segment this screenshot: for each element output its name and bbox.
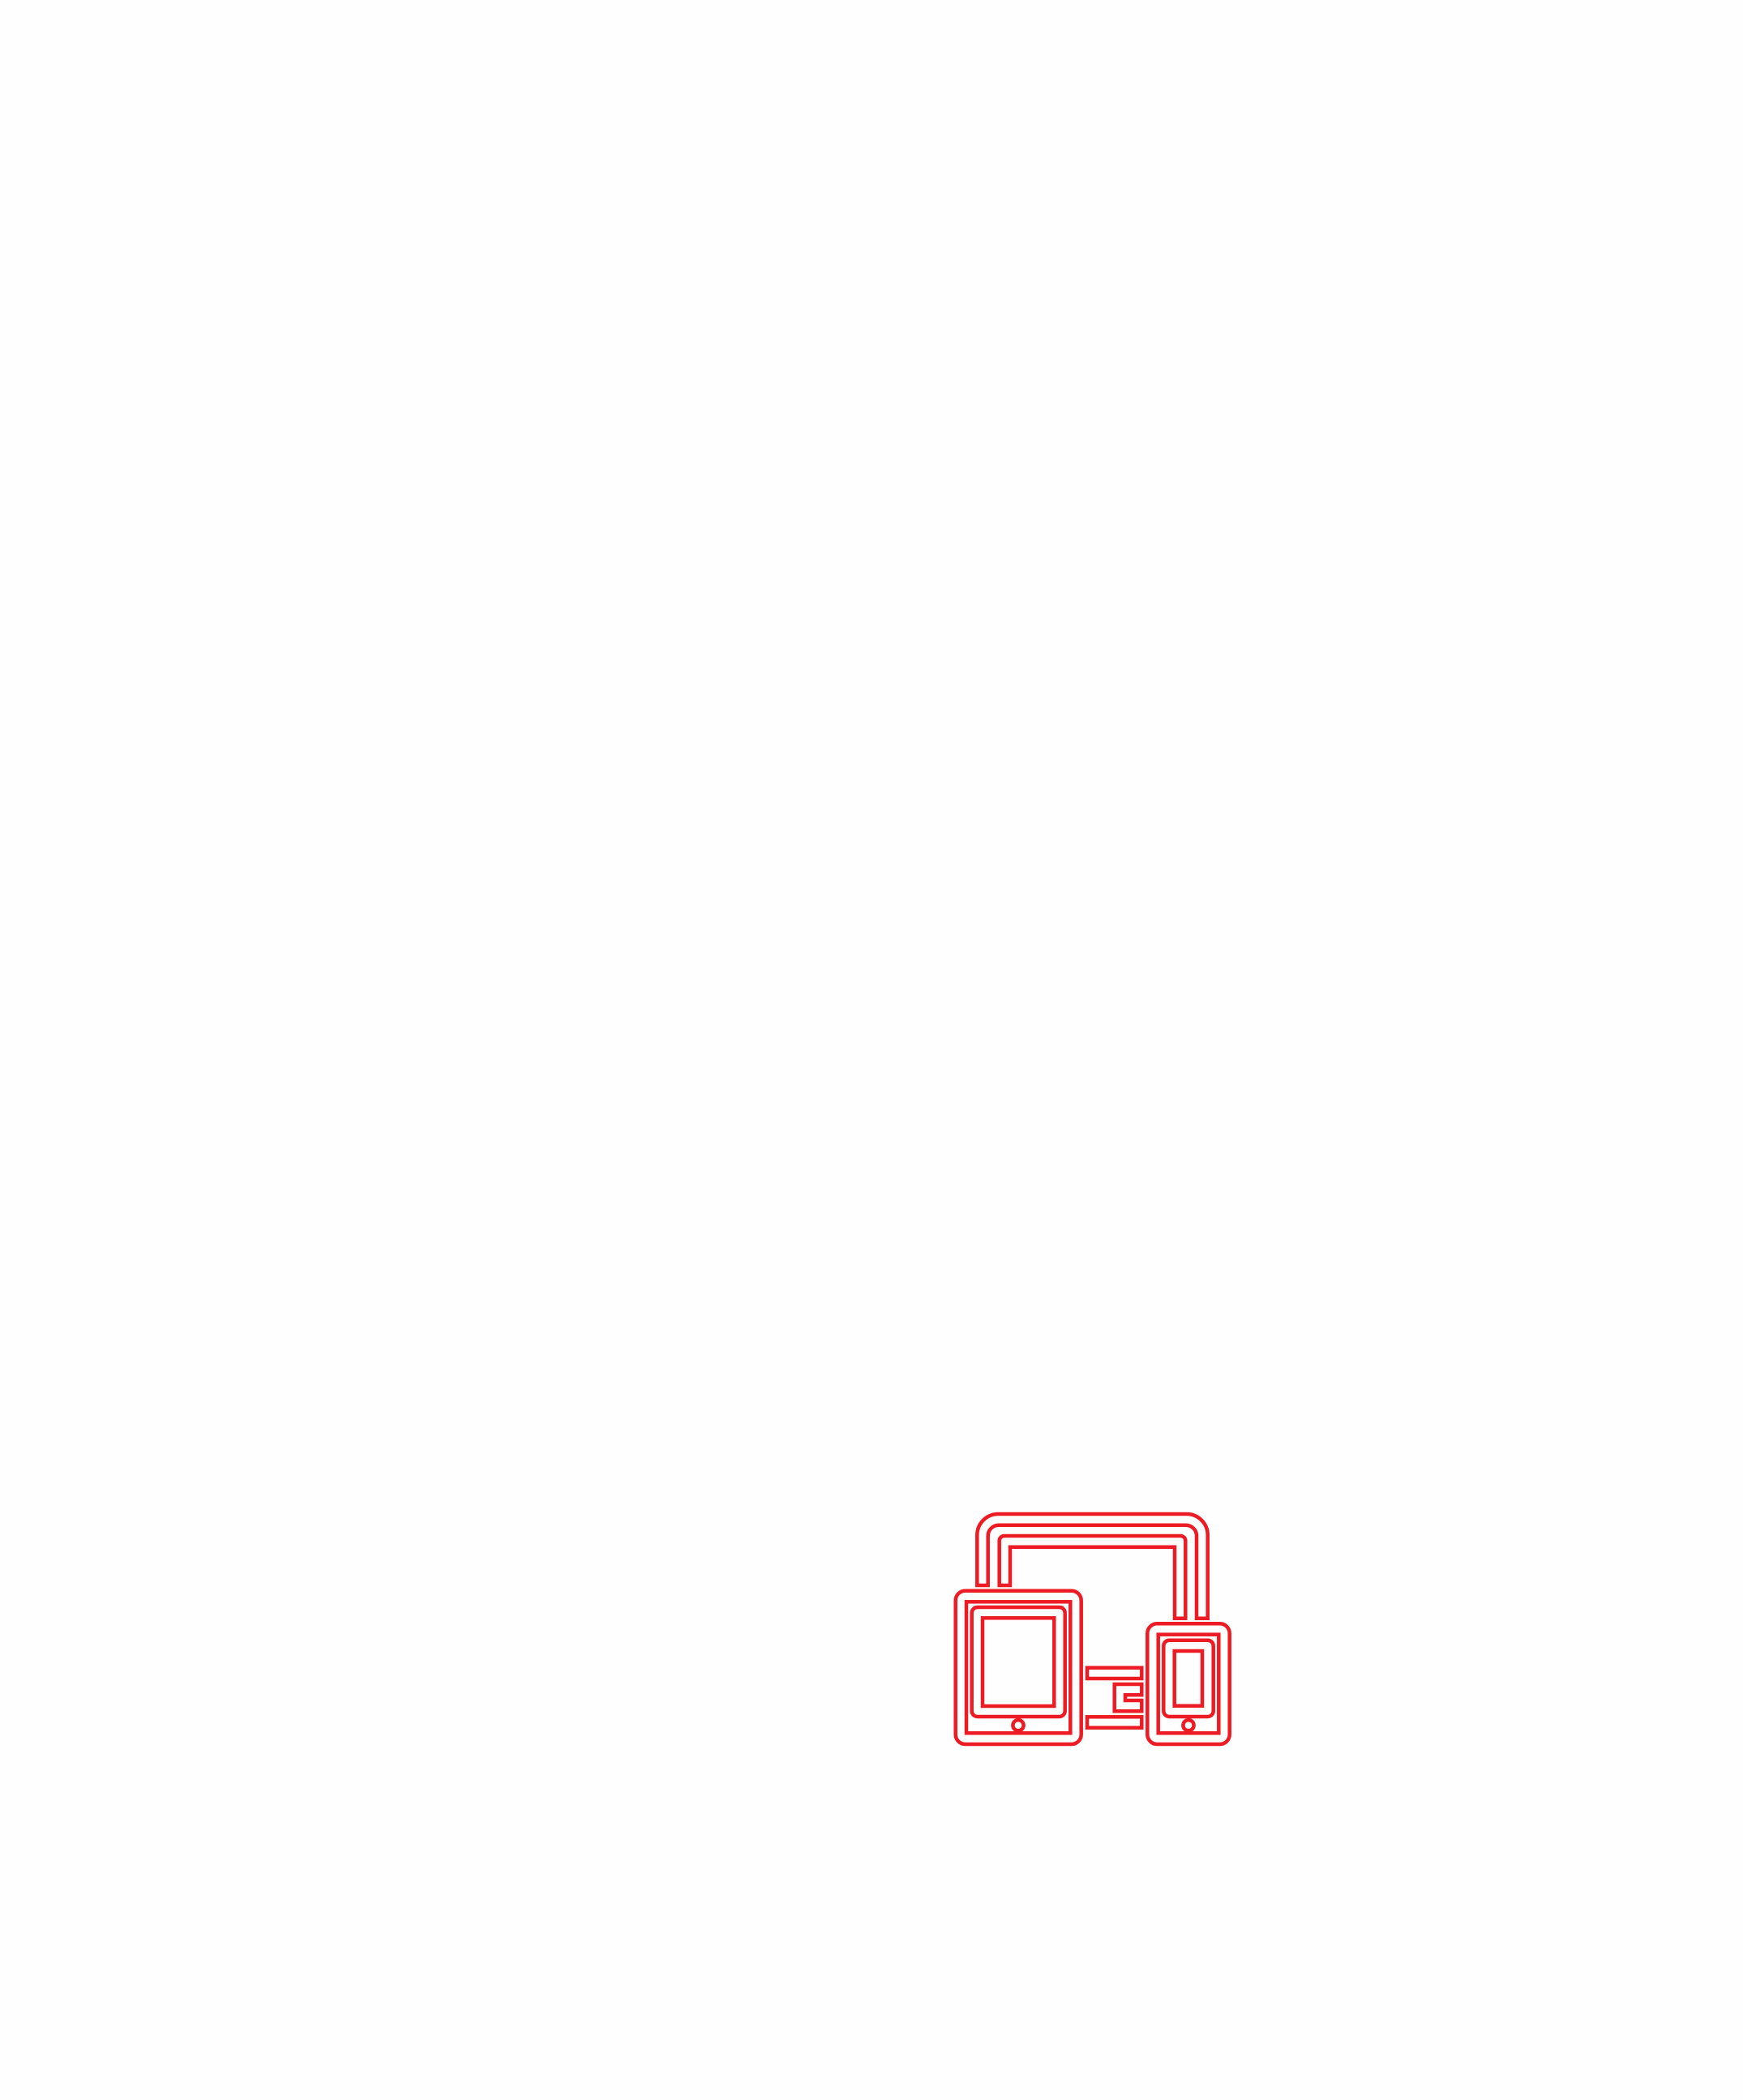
icon: smartphone xyxy=(1147,1623,1230,1744)
icon: connected tablet and phone xyxy=(956,1514,1230,1744)
icon: link connector between devices xyxy=(1087,1668,1141,1728)
icon: tablet xyxy=(956,1591,1081,1744)
arrow: inner connecting band between tablet and phone xyxy=(1000,1536,1185,1619)
arrow: outer connecting band between tablet and phone xyxy=(977,1514,1208,1619)
